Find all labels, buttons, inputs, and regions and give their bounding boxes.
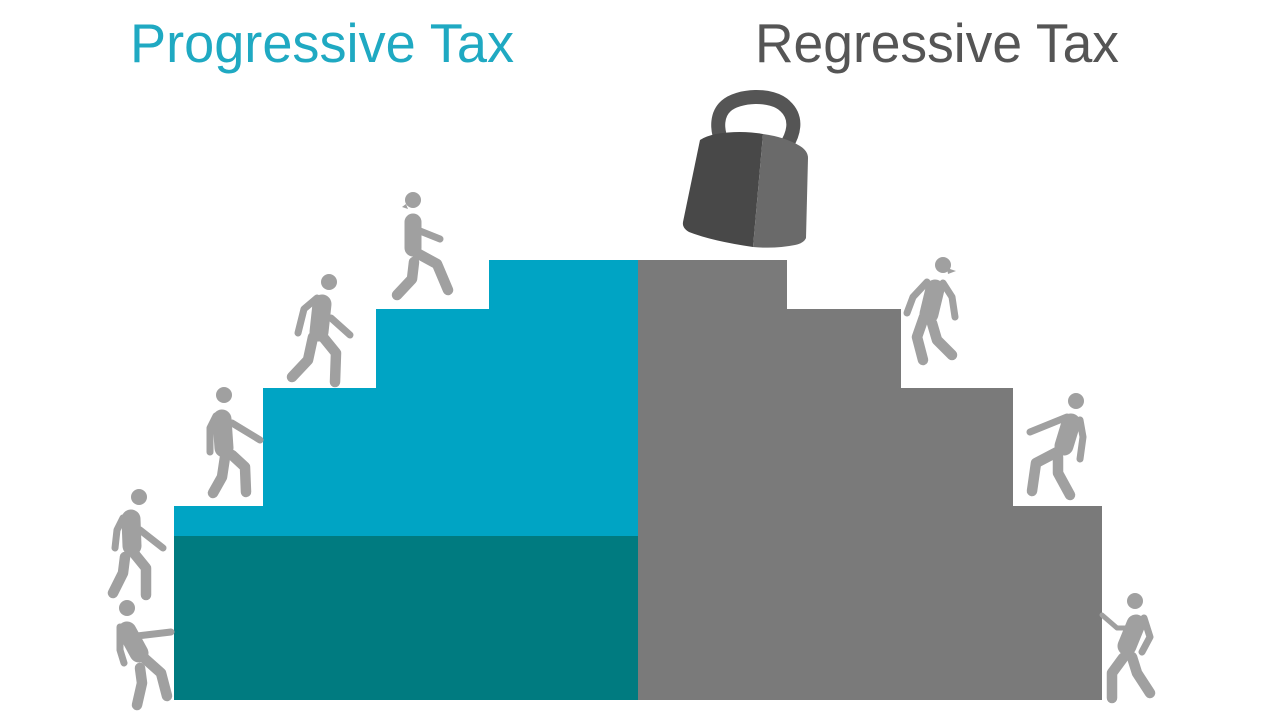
cap brim xyxy=(947,268,956,274)
title: Progressive Tax: Progressive Tax xyxy=(130,12,514,74)
title: Regressive Tax: Regressive Tax xyxy=(755,12,1119,74)
progressive tax staircase xyxy=(174,260,638,700)
regressive tax staircase xyxy=(638,260,1102,700)
weight body light side xyxy=(753,134,808,248)
figure: walker on regressive middle step xyxy=(1030,393,1084,495)
icon: heavy weight xyxy=(683,97,808,248)
upper blue steps xyxy=(174,260,638,536)
figure: walker near regressive top xyxy=(907,257,956,360)
lower teal block xyxy=(174,536,638,700)
figure: climber on third step xyxy=(292,274,350,382)
weight body dark side xyxy=(683,132,763,247)
figure: climber on first step xyxy=(113,489,163,595)
figure: walker at regressive base xyxy=(1102,593,1150,698)
hair tail xyxy=(402,204,408,209)
weight handle xyxy=(718,97,793,146)
figure: climber at top step xyxy=(397,192,448,295)
figure: climber at the base xyxy=(119,600,171,705)
figure: climber on second step xyxy=(210,387,260,493)
